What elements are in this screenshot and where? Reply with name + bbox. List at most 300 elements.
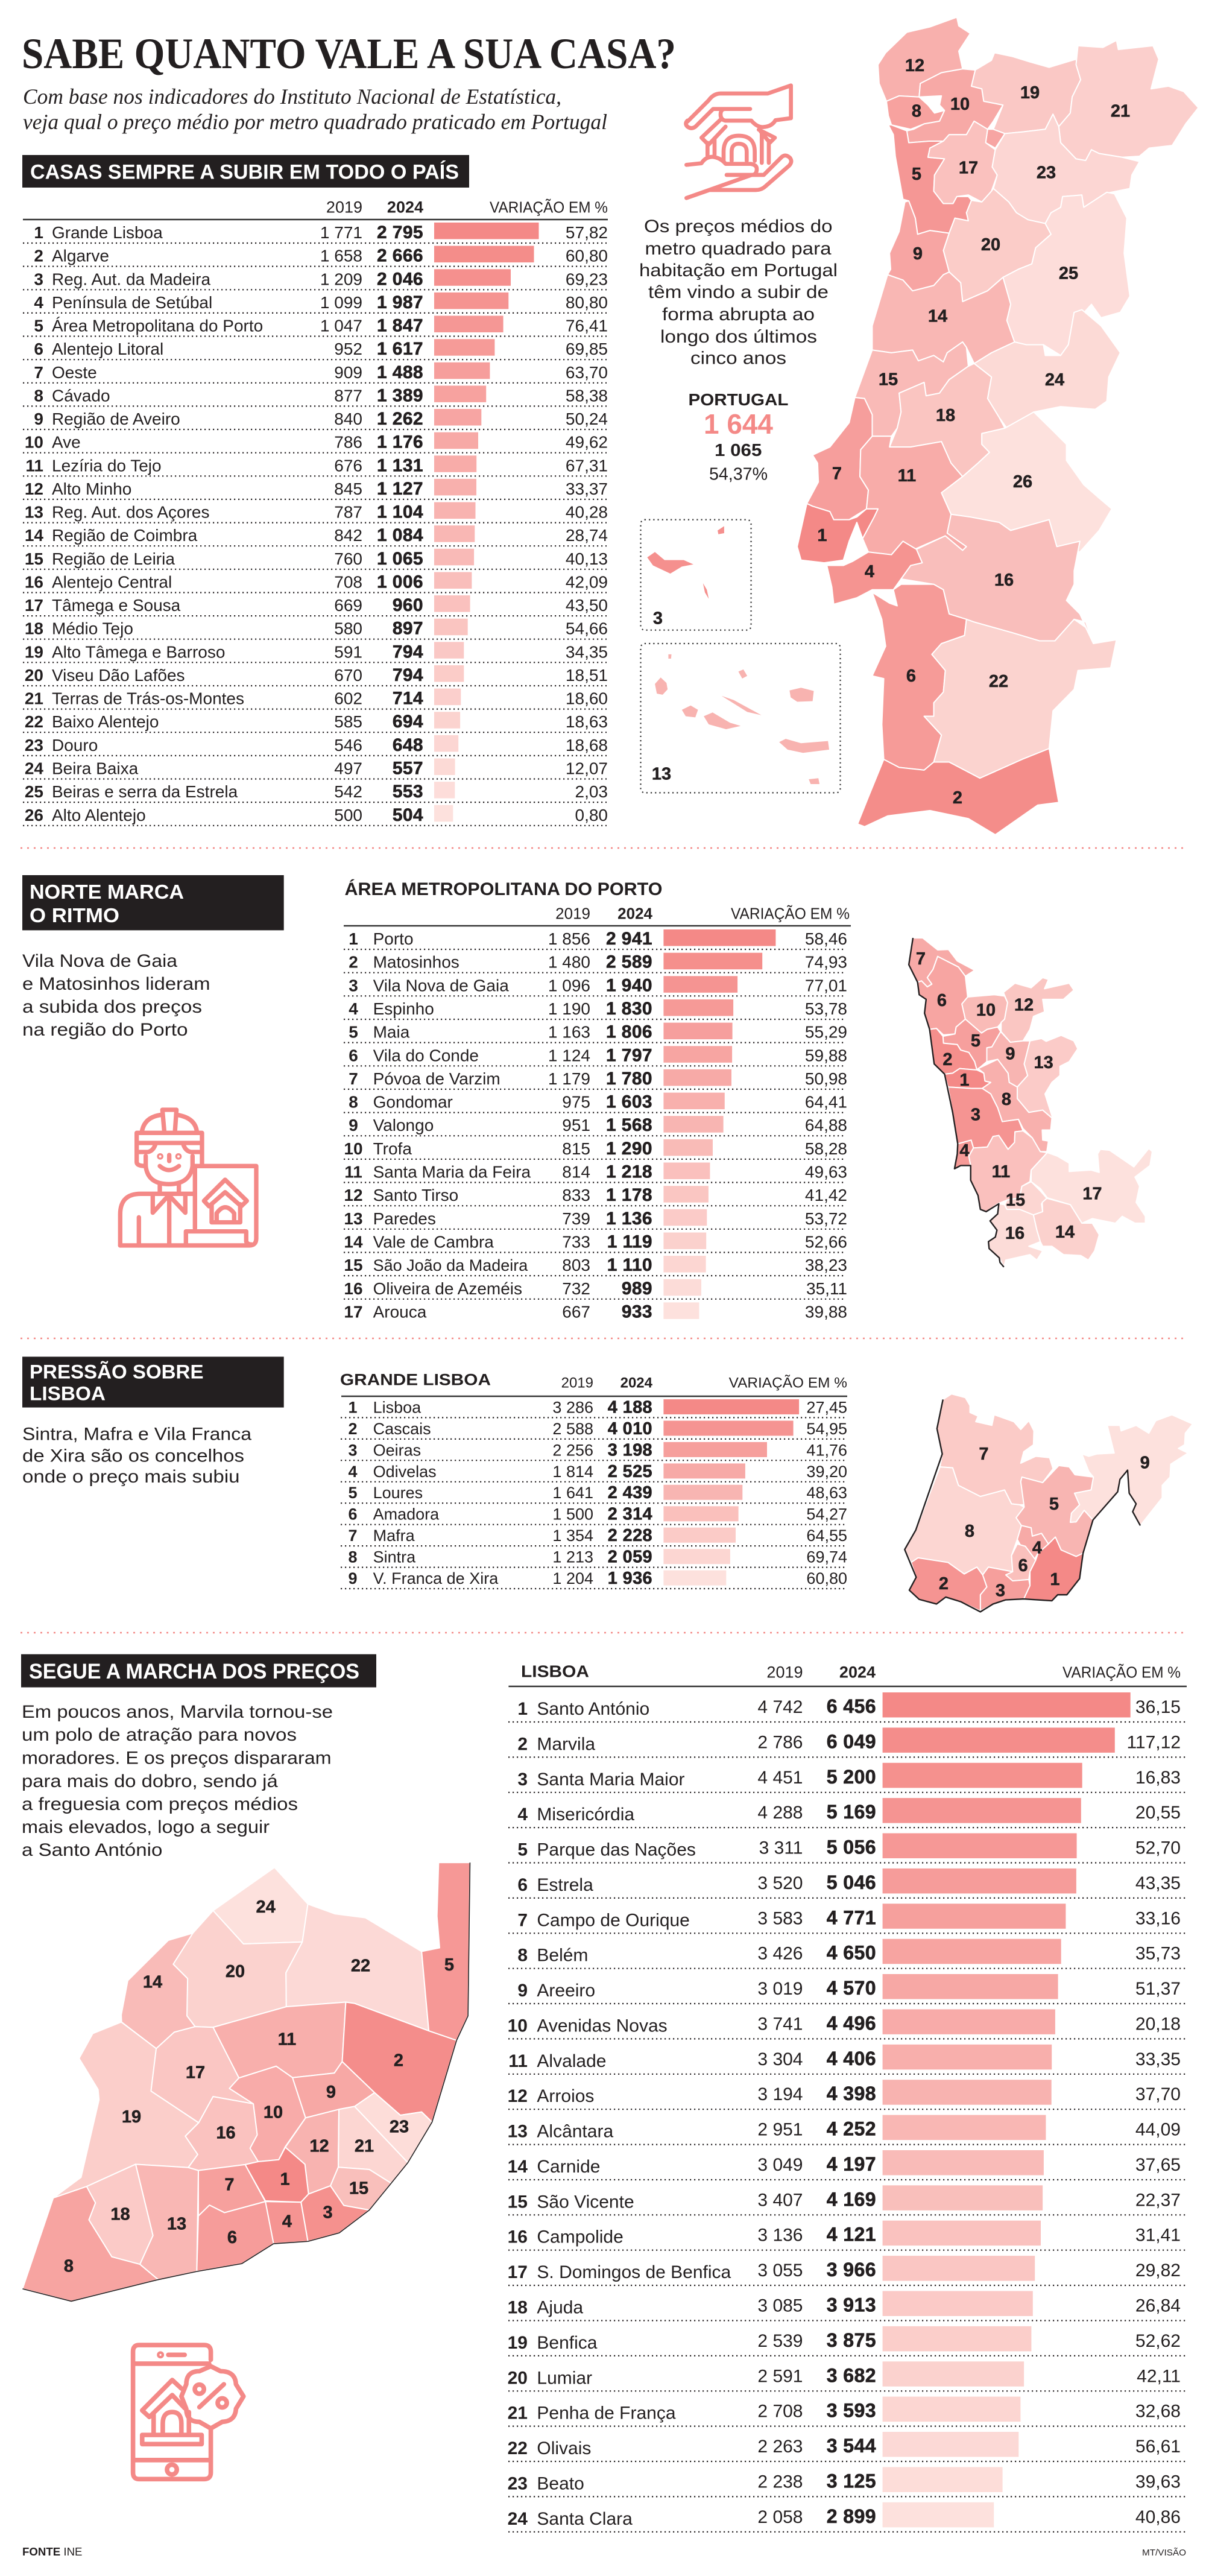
heading: norte marca o ritmo: O RITMO xyxy=(30,904,119,926)
row 21: 602 xyxy=(334,689,362,708)
map labels: Lisboa: 6 xyxy=(1018,1556,1028,1575)
row 20: 42,11 xyxy=(1137,2366,1181,2386)
text block: norte: Vila Nova de Gaia xyxy=(22,951,177,971)
row 2: 54,95 xyxy=(806,1420,847,1438)
row 26: Alto Alentejo xyxy=(52,806,146,824)
row 12: 845 xyxy=(334,479,362,498)
row 7: 1 354 xyxy=(552,1527,593,1545)
row 6: 5 046 xyxy=(827,1872,876,1893)
row 23 xyxy=(508,2467,1181,2493)
row 8: 1 389 xyxy=(377,385,423,405)
row 26 xyxy=(25,805,608,825)
row 6: 59,88 xyxy=(805,1046,847,1065)
row 11: 33,35 xyxy=(1135,2049,1181,2069)
row 14: 842 xyxy=(334,526,362,545)
row 15: 40,13 xyxy=(566,549,608,568)
row 4: 4 288 xyxy=(757,1803,803,1823)
row 12: 12 xyxy=(508,2086,528,2106)
row 9: 1 936 xyxy=(608,1569,652,1588)
row 9: Valongo xyxy=(373,1116,434,1135)
region 23 xyxy=(992,114,1140,224)
table header xyxy=(341,1375,847,1396)
row 8: 35,73 xyxy=(1135,1944,1181,1964)
map labels: Porto: 11 xyxy=(992,1162,1010,1182)
map labels: Lisboa freguesias: 8 xyxy=(64,2257,74,2276)
row 15: 1 110 xyxy=(607,1255,652,1275)
row 18 xyxy=(508,2291,1181,2317)
table: regiões do país xyxy=(23,198,608,826)
map labels: Lisboa freguesias: 6 xyxy=(227,2228,237,2247)
row 17 xyxy=(25,595,608,615)
row 3: 1 940 xyxy=(606,975,652,995)
region 24 xyxy=(213,1867,308,1944)
row 8: 1 213 xyxy=(552,1548,593,1566)
row 21: 714 xyxy=(393,689,423,709)
map: Área Metropolitana do Porto xyxy=(909,938,1152,1267)
table: Grande Lisboa xyxy=(340,1370,847,1589)
row 23: 39,63 xyxy=(1135,2472,1181,2492)
region 9 xyxy=(888,201,949,291)
row 12: 4 398 xyxy=(827,2083,876,2104)
map labels: Porto: 2 xyxy=(942,1050,953,1069)
row 19: 2 539 xyxy=(757,2331,803,2351)
row 14: 4 197 xyxy=(827,2153,876,2175)
heading: norte marca o ritmo: NORTE MARCA xyxy=(30,881,184,903)
text block: intro xyxy=(639,217,838,368)
heading: norte marca o ritmo xyxy=(22,875,284,930)
text block: Marvila: mais elevados, logo a seguir xyxy=(22,1817,270,1837)
row 1: 27,45 xyxy=(806,1398,847,1416)
row 14: 14 xyxy=(344,1233,363,1251)
row 17: S. Domingos de Benfica xyxy=(537,2262,731,2282)
row 23: 2 238 xyxy=(757,2472,803,2492)
row 11: 67,31 xyxy=(566,456,608,475)
row 18: 3 913 xyxy=(827,2294,876,2316)
row 18: 897 xyxy=(393,619,423,639)
text block: Marvila: para mais do dobro, sendo já xyxy=(22,1771,278,1791)
region 6 xyxy=(872,584,967,770)
map labels: Porto: 1 xyxy=(959,1071,969,1090)
row 13: 40,28 xyxy=(566,503,608,522)
map labels: Porto: 10 xyxy=(976,1001,996,1020)
map labels: Portugal: 9 xyxy=(913,244,923,264)
map labels: Lisboa freguesias: 22 xyxy=(351,1957,370,1976)
map labels: Lisboa freguesias: 2 xyxy=(394,2051,403,2070)
heading: segue a marcha dos preços xyxy=(21,1654,376,1688)
text block: Lisboa: onde o preço mais subiu xyxy=(22,1467,240,1487)
row 17: 933 xyxy=(622,1302,652,1321)
row 18: 26,84 xyxy=(1135,2296,1181,2316)
table: Lisboa freguesias xyxy=(508,1662,1187,2532)
row 10: 786 xyxy=(334,433,362,452)
row 5: Parque das Nações xyxy=(537,1840,696,1860)
row 2: 2 xyxy=(517,1734,528,1754)
row 1: 1 771 xyxy=(320,223,362,242)
row 17: 39,88 xyxy=(805,1302,847,1321)
row 15: 760 xyxy=(334,549,362,568)
row 15: 15 xyxy=(508,2192,528,2212)
map labels: Portugal: 12 xyxy=(905,56,924,75)
map labels: Lisboa: 8 xyxy=(965,1522,974,1541)
map labels: Portugal: 20 xyxy=(981,235,1000,255)
region 9 xyxy=(1070,1415,1193,1525)
row 15: São Vicente xyxy=(537,2192,634,2212)
row 4: 4 xyxy=(349,999,358,1018)
row 4 xyxy=(348,1462,847,1481)
map labels: Lisboa freguesias: 11 xyxy=(278,2030,296,2049)
table header xyxy=(23,198,608,220)
row 9: 1 204 xyxy=(552,1569,593,1587)
row 10: 20,18 xyxy=(1135,2014,1181,2034)
region 1 xyxy=(245,2147,309,2202)
row 13: Paredes xyxy=(373,1209,436,1228)
row 21: 2 708 xyxy=(757,2402,803,2422)
map labels: Porto: 5 xyxy=(971,1031,980,1051)
row 9: 50,24 xyxy=(566,410,608,428)
region 23 xyxy=(355,2093,432,2163)
row 23: 23 xyxy=(508,2473,528,2493)
coastline xyxy=(909,938,1004,1267)
row 5 xyxy=(34,316,608,335)
row 20: 2 591 xyxy=(757,2366,803,2386)
row 15: Região de Leiria xyxy=(52,549,175,568)
row 16: Alentejo Central xyxy=(52,573,172,591)
row 2: Algarve xyxy=(52,247,109,265)
row 18: 3 085 xyxy=(757,2296,803,2316)
row 7: Oeste xyxy=(52,363,97,382)
row 3 xyxy=(348,1440,847,1460)
icon: phone with house and percent badge xyxy=(133,2345,244,2479)
map labels: Portugal: 14 xyxy=(928,306,947,326)
row 12: 833 xyxy=(562,1186,590,1204)
region 22 xyxy=(286,1904,429,2031)
map labels: Portugal: 18 xyxy=(936,406,955,425)
region 1 xyxy=(944,1069,991,1089)
row 23: 648 xyxy=(393,735,423,755)
table: Área Metropolitana do Porto xyxy=(344,879,851,1321)
region 14 xyxy=(121,1933,195,2048)
row 3: 2 256 xyxy=(552,1441,593,1459)
row 17: Arouca xyxy=(373,1302,427,1321)
row 3: Vila Nova de Gaia xyxy=(373,976,509,995)
map labels: Porto: 7 xyxy=(916,949,926,969)
row 9: 840 xyxy=(334,410,362,428)
row 8: Cávado xyxy=(52,386,110,405)
table header: 2024 xyxy=(839,1663,876,1682)
row 22: 18,63 xyxy=(566,712,608,731)
row 1: 4 188 xyxy=(608,1397,652,1417)
row 12: Alto Minho xyxy=(52,479,131,498)
map labels: Porto: 4 xyxy=(959,1141,969,1160)
region 12 xyxy=(285,2109,339,2194)
row 7: 63,70 xyxy=(566,363,608,382)
row 17: 669 xyxy=(334,596,362,615)
row 13: 4 252 xyxy=(827,2118,876,2140)
text block: Marvila: moradores. E os preços dispararam xyxy=(22,1748,332,1768)
region 15 xyxy=(330,2167,391,2210)
row 4: 1 814 xyxy=(552,1463,593,1481)
map: Lisboa freguesias xyxy=(22,1862,470,2301)
row 6 xyxy=(349,1045,847,1065)
row 25: 25 xyxy=(25,782,43,801)
row 13: 787 xyxy=(334,503,362,522)
row 9: 9 xyxy=(517,1981,528,2001)
row 11: 11 xyxy=(344,1163,362,1181)
text block: Marvila: a Santo António xyxy=(22,1840,162,1860)
region 26 xyxy=(941,412,1112,552)
text block: norte: e Matosinhos lideram xyxy=(22,974,210,994)
row 15: 803 xyxy=(562,1256,590,1274)
row 15 xyxy=(344,1255,847,1275)
table header: VARIAÇÃO EM % xyxy=(729,1375,847,1391)
region 8 xyxy=(978,1059,1052,1151)
row 5: Área Metropolitana do Porto xyxy=(52,316,263,335)
row 9: Região de Aveiro xyxy=(52,410,180,428)
map labels: Portugal: 5 xyxy=(912,165,921,184)
row 7 xyxy=(349,1069,847,1089)
row 8: Gondomar xyxy=(373,1093,453,1112)
row 2: Cascais xyxy=(373,1420,431,1438)
map labels: Portugal: 25 xyxy=(1059,264,1078,283)
row 16: 16 xyxy=(508,2227,528,2247)
row 5: 5 xyxy=(34,316,43,335)
row 19: 794 xyxy=(393,642,423,662)
row 12: Arroios xyxy=(537,2086,594,2106)
row 3: 77,01 xyxy=(805,976,847,995)
row 2: 117,12 xyxy=(1126,1732,1181,1752)
map labels: Porto: 13 xyxy=(1034,1053,1053,1072)
row 2: 2 786 xyxy=(757,1732,803,1752)
map labels: Lisboa freguesias: 5 xyxy=(444,1955,454,1975)
region 18 xyxy=(889,364,1005,476)
row 16 xyxy=(344,1279,847,1299)
region 15 xyxy=(855,342,968,436)
map labels: Lisboa xyxy=(939,1445,1150,1601)
row 23: Douro xyxy=(52,736,98,755)
row 1 xyxy=(348,1397,847,1417)
row 12 xyxy=(508,2080,1181,2106)
row 10: 815 xyxy=(562,1139,590,1158)
row 9: 60,80 xyxy=(806,1569,847,1587)
row 13: 13 xyxy=(25,503,43,522)
row 5: 3 311 xyxy=(759,1838,803,1858)
row 2: 60,80 xyxy=(566,247,608,265)
row 4: 1 987 xyxy=(377,293,423,312)
map labels: Lisboa freguesias: 15 xyxy=(349,2179,368,2198)
row 6: 54,27 xyxy=(806,1505,847,1524)
row 1: 1 xyxy=(517,1699,528,1719)
table header: 2024 xyxy=(617,905,653,923)
row 2: 1 480 xyxy=(548,953,590,972)
table header: VARIAÇÃO EM % xyxy=(1062,1663,1181,1682)
row 5: 1 163 xyxy=(548,1023,590,1042)
row 10: 1 176 xyxy=(377,432,423,452)
map labels: Portugal xyxy=(652,56,1130,808)
row 22: 694 xyxy=(393,712,423,732)
region 16 xyxy=(988,1204,1043,1267)
row 2: 4 010 xyxy=(608,1419,652,1438)
row 24: 40,86 xyxy=(1135,2507,1181,2527)
region 8 xyxy=(904,1467,1024,1575)
map labels: Lisboa freguesias: 20 xyxy=(226,1962,245,1981)
row 5: Maia xyxy=(373,1023,410,1042)
row 16: Campolide xyxy=(537,2227,624,2247)
map labels: Portugal: 21 xyxy=(1111,101,1130,121)
map labels: Lisboa freguesias: 1 xyxy=(280,2170,290,2189)
region 13 xyxy=(1017,1036,1078,1119)
region 9 xyxy=(987,1031,1030,1087)
row 8: 1 603 xyxy=(606,1092,652,1112)
row 25: 553 xyxy=(393,782,423,802)
row 22: 56,61 xyxy=(1135,2437,1181,2457)
region piece xyxy=(986,129,1005,148)
region 14 xyxy=(872,272,1014,364)
row 2 xyxy=(517,1727,1181,1754)
row 4: 4 xyxy=(34,293,43,312)
row 19: Benfica xyxy=(537,2333,598,2353)
row 5: 1 641 xyxy=(552,1484,593,1502)
row 16: 732 xyxy=(562,1279,590,1298)
row 6: 6 xyxy=(348,1505,358,1524)
row 4: 1 830 xyxy=(606,999,652,1019)
row 14 xyxy=(344,1232,847,1252)
heading: pressão sobre Lisboa xyxy=(22,1356,284,1408)
region 7 xyxy=(937,1394,1053,1505)
icon: construction worker with house plan xyxy=(120,1110,256,1245)
row 13: 2 951 xyxy=(757,2120,803,2140)
region 10 xyxy=(907,69,1003,143)
row 11: 814 xyxy=(562,1163,590,1181)
row 26: 0,80 xyxy=(575,806,608,824)
row 6: 6 xyxy=(34,340,43,358)
row 7: 33,16 xyxy=(1135,1908,1181,1928)
row 9: 1 262 xyxy=(377,409,423,429)
callout: Portugal average: 54,37% xyxy=(709,464,768,484)
row 17: 3 055 xyxy=(757,2261,803,2280)
table header: VARIAÇÃO EM % xyxy=(490,198,608,216)
text block: intro: cinco anos xyxy=(690,349,786,368)
row 6: Amadora xyxy=(373,1505,440,1524)
row 3: 3 xyxy=(517,1770,528,1790)
table title: GRANDE LISBOA xyxy=(340,1370,491,1388)
row 15: São João da Madeira xyxy=(373,1256,528,1274)
row 6: Vila do Conde xyxy=(373,1046,479,1065)
region 6 xyxy=(1006,1544,1036,1581)
map labels: Lisboa freguesias: 4 xyxy=(282,2212,292,2232)
region 4 xyxy=(827,541,922,604)
region 19 xyxy=(53,2022,199,2198)
title: SABE QUANTO VALE A SUA CASA? xyxy=(22,30,676,78)
row 7: Póvoa de Varzim xyxy=(373,1069,500,1088)
row 10: 58,28 xyxy=(805,1139,847,1158)
map labels: Lisboa: 1 xyxy=(1050,1570,1059,1589)
row 10 xyxy=(25,432,608,452)
region 17 xyxy=(928,121,997,204)
row 8: 8 xyxy=(34,386,43,405)
row 2: 2 xyxy=(34,247,43,265)
row 19: 3 875 xyxy=(827,2329,876,2351)
table header: 2019 xyxy=(766,1663,803,1682)
row 4: 80,80 xyxy=(566,293,608,312)
inset: Açores xyxy=(641,644,841,793)
row 25: Beiras e serra da Estrela xyxy=(52,782,238,801)
row 26: 500 xyxy=(334,806,362,824)
map labels: Portugal: 10 xyxy=(950,95,970,114)
row 19: Alto Tâmega e Barroso xyxy=(52,642,225,661)
row 14: 52,66 xyxy=(805,1233,847,1251)
row 15: 38,23 xyxy=(805,1256,847,1274)
row 8: Belém xyxy=(537,1946,588,1966)
row 11: 1 218 xyxy=(606,1162,652,1182)
map: Grande Lisboa xyxy=(904,1394,1193,1612)
row 9: 951 xyxy=(562,1116,590,1135)
region 15 xyxy=(1005,1182,1047,1230)
row 21: 21 xyxy=(508,2404,528,2423)
row 8: 8 xyxy=(517,1946,528,1966)
row 18: 18 xyxy=(508,2298,528,2317)
row 7: 3 583 xyxy=(757,1908,803,1928)
row 14: Carnide xyxy=(537,2157,600,2177)
row 1: 57,82 xyxy=(566,223,608,242)
row 8: 975 xyxy=(562,1093,590,1112)
row 3 xyxy=(34,269,608,289)
row 8: 58,38 xyxy=(566,386,608,405)
row 3: 41,76 xyxy=(806,1441,847,1459)
row 12: Santo Tirso xyxy=(373,1186,458,1204)
region 2 xyxy=(857,748,1059,835)
map labels: Portugal: 2 xyxy=(953,788,962,808)
row 7: 7 xyxy=(349,1069,358,1088)
map labels: Portugal: 3 xyxy=(653,609,663,628)
row 7: 1 488 xyxy=(377,362,423,382)
row 4: 1 099 xyxy=(320,293,362,312)
row 2: 2 xyxy=(348,1420,358,1438)
region 4 xyxy=(955,1140,973,1169)
row 21 xyxy=(25,689,608,709)
region 2 xyxy=(930,1028,977,1074)
row 24: 2 899 xyxy=(827,2505,876,2527)
row 7 xyxy=(348,1526,847,1545)
row 21: Terras de Trás-os-Montes xyxy=(52,689,244,708)
map labels: Lisboa freguesias: 13 xyxy=(167,2215,186,2234)
region 4 xyxy=(265,2201,308,2244)
row 9: Areeiro xyxy=(537,1981,595,2001)
map labels: Portugal: 8 xyxy=(912,101,921,121)
map labels: Portugal: 4 xyxy=(865,562,874,581)
row 16 xyxy=(508,2221,1181,2247)
row 5: 55,29 xyxy=(805,1023,847,1042)
row 24: 2 058 xyxy=(757,2507,803,2527)
row 19 xyxy=(25,642,608,662)
region 3 xyxy=(301,2186,369,2241)
row 10: Trofa xyxy=(373,1139,412,1158)
row 10 xyxy=(344,1139,847,1159)
text block: Marvila: um polo de atração para novos xyxy=(22,1725,297,1745)
row 6: 69,85 xyxy=(566,340,608,358)
row 11: 676 xyxy=(334,456,362,475)
row 19 xyxy=(508,2326,1181,2353)
row 12: 12 xyxy=(25,479,43,498)
row 3: 5 200 xyxy=(827,1766,876,1788)
row 7: 1 179 xyxy=(548,1069,590,1088)
row 10: Avenidas Novas xyxy=(537,2016,668,2036)
row 13 xyxy=(344,1209,847,1229)
map labels: Lisboa freguesias: 12 xyxy=(309,2136,329,2156)
row 13: 1 136 xyxy=(606,1209,652,1229)
row 13: 1 104 xyxy=(377,502,423,522)
row 22: Baixo Alentejo xyxy=(52,712,159,731)
row 2: Matosinhos xyxy=(373,953,459,972)
